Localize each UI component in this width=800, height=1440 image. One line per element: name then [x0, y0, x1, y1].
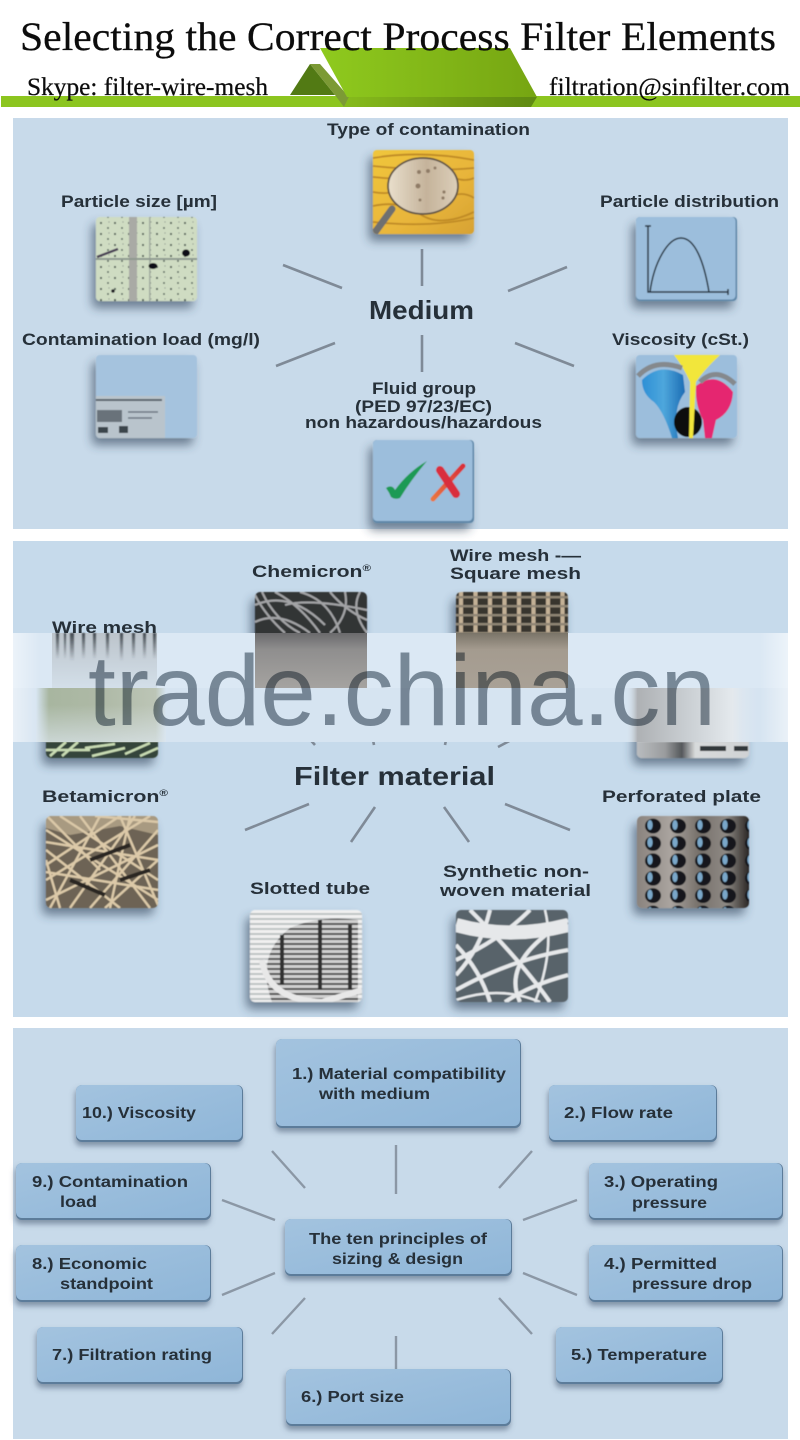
connector lines	[276, 249, 574, 372]
box: material compatibility: with medium	[318, 1086, 430, 1103]
label: viscosity: Viscosity (cSt.)	[612, 331, 749, 349]
label: betamicron: ®	[159, 788, 168, 798]
icon: paint pouring	[636, 355, 737, 438]
label: fluid group: non hazardous/hazardous	[305, 414, 542, 432]
icon: lab balance	[96, 355, 197, 438]
box: permitted pressure drop	[589, 1245, 783, 1302]
image: wire mesh	[35, 742, 161, 772]
box: viscosity	[76, 1085, 243, 1142]
box: temperature	[556, 1327, 723, 1384]
label: synthetic non-woven: Synthetic non-	[443, 863, 589, 881]
box: economic standpoint	[16, 1245, 211, 1302]
green bar	[1, 96, 800, 107]
label: contamination load: Contamination load (mg/l)	[22, 331, 260, 349]
connector lines	[222, 1145, 577, 1385]
connector lines	[245, 730, 570, 842]
label: fluid group: (PED 97/23/EC)	[355, 398, 492, 416]
image: slotted tube	[250, 910, 362, 1002]
image: synthetic non-woven	[456, 910, 568, 1002]
icon: check and cross	[373, 440, 474, 523]
icon: particle micrograph	[96, 217, 197, 301]
label: type of contamination: Type of contamination	[327, 121, 530, 139]
box: economic standpoint: 8.) Economic	[32, 1256, 147, 1273]
box: permitted pressure drop: pressure drop	[632, 1276, 752, 1293]
label: synthetic non-woven: woven material	[439, 882, 591, 900]
label: fluid group: Fluid group	[372, 380, 476, 398]
box: flow rate: 2.) Flow rate	[564, 1105, 673, 1122]
title: Selecting the Correct Process Filter Elements	[20, 14, 776, 59]
label: particle size: Particle size [µm]	[61, 193, 217, 211]
email contact: filtration@sinfilter.com	[549, 72, 790, 101]
label: perforated plate: Perforated plate	[602, 788, 761, 806]
label: betamicron: Betamicron	[42, 788, 133, 806]
watermark band	[0, 633, 800, 747]
box: economic standpoint: standpoint	[60, 1276, 153, 1293]
green ribbon graphic	[290, 48, 537, 107]
label: wire mesh: Wire mesh	[52, 619, 157, 637]
image: chemicron	[244, 591, 370, 633]
box: port size: 6.) Port size	[301, 1389, 404, 1406]
box: filtration rating	[37, 1327, 243, 1384]
image: metal filter element	[626, 742, 752, 772]
box: operating pressure: pressure	[632, 1195, 707, 1212]
panel: medium	[13, 118, 788, 529]
box: center, ten principles	[285, 1219, 512, 1276]
label: square wire mesh: Square mesh	[450, 565, 581, 583]
label: particle distribution: Particle distribution	[600, 193, 779, 211]
icon: distribution curve	[636, 217, 737, 301]
box: viscosity: 10.) Viscosity	[82, 1105, 196, 1122]
icon: magnifier on wood	[373, 150, 474, 234]
label: fluid group	[305, 380, 542, 432]
label: synthetic non-woven	[439, 863, 591, 900]
heading: filter material: Filter material	[294, 761, 495, 791]
skype contact: Skype: filter-wire-mesh	[27, 72, 268, 101]
box: operating pressure	[589, 1163, 783, 1220]
header banner	[1, 14, 800, 107]
heading: medium: Medium	[369, 295, 474, 325]
box: operating pressure: 3.) Operating	[604, 1174, 718, 1191]
box: flow rate	[549, 1085, 717, 1142]
image: square mesh	[456, 592, 568, 684]
box: material compatibility	[276, 1039, 521, 1128]
box: port size	[286, 1369, 511, 1426]
box: contamination load	[16, 1163, 211, 1220]
box: temperature: 5.) Temperature	[571, 1347, 707, 1364]
box: filtration rating: 7.) Filtration rating	[52, 1347, 212, 1364]
box: center, ten principles: The ten principles of	[309, 1231, 488, 1248]
label: slotted tube: Slotted tube	[250, 880, 370, 898]
label: chemicron: Chemicron	[252, 563, 338, 581]
label: square wire mesh	[450, 547, 582, 583]
panel: filter material	[13, 541, 788, 1017]
box: contamination load: load	[60, 1194, 97, 1211]
box: center, ten principles: sizing & design	[332, 1251, 463, 1268]
label: square wire mesh: Wire mesh -—	[450, 547, 582, 565]
box: material compatibility: 1.) Material compatibility	[292, 1066, 506, 1083]
watermark text: trade.china.cn	[88, 635, 716, 747]
image: betamicron	[46, 815, 158, 908]
box: permitted pressure drop: 4.) Permitted	[604, 1256, 717, 1273]
panel: ten principles	[13, 1028, 788, 1439]
box: contamination load: 9.) Contamination	[32, 1174, 188, 1191]
label: chemicron: ®	[362, 563, 371, 573]
image: perforated plate	[637, 816, 749, 908]
